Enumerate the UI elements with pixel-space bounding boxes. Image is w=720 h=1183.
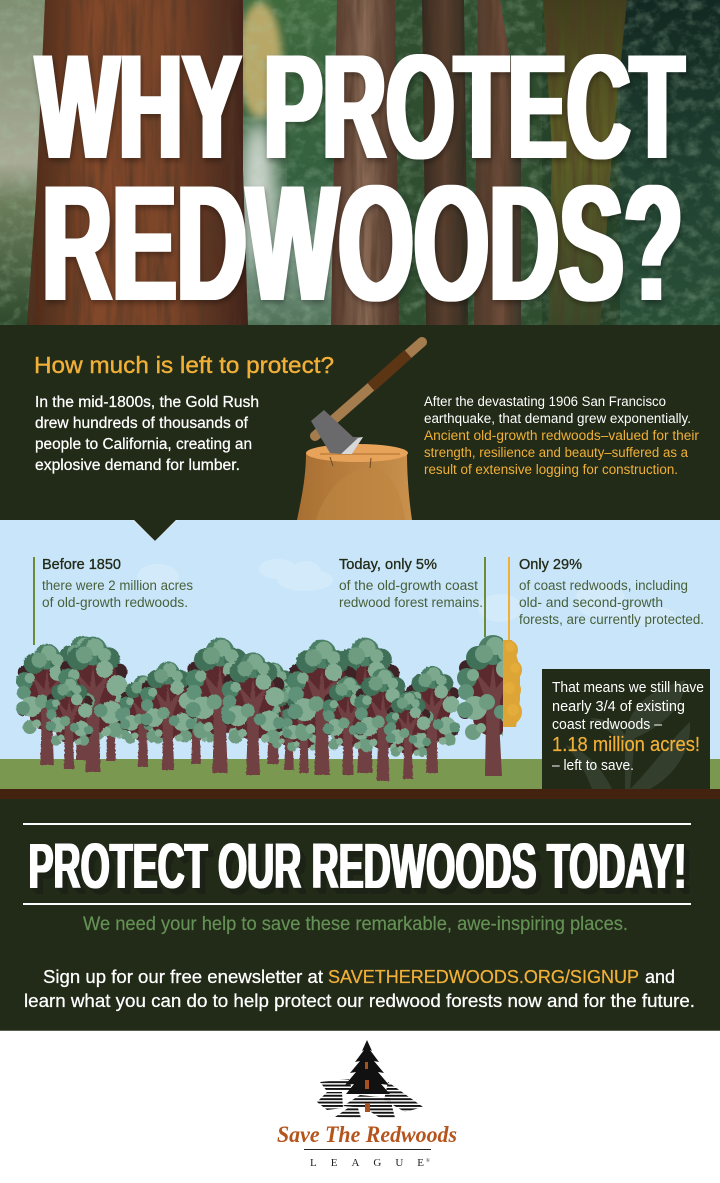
- clouds: [137, 559, 675, 625]
- text block: gold rush: people to California, creating an: [35, 436, 252, 453]
- logo: save the redwoods league: [277, 1040, 457, 1169]
- text block: 1906 earthquake: result of extensive logging for construction.: [424, 462, 678, 477]
- text block: sign up: SAVETHEREDWOODS.ORG/SIGNUP: [328, 967, 639, 987]
- callout: 1.18 million acres: That means we still have: [552, 680, 704, 696]
- text block: gold rush: [35, 394, 259, 474]
- stat: today only 5 percent: of the old-growth coast: [339, 578, 478, 593]
- text block: gold rush: In the mid-1800s, the Gold Rush: [35, 394, 259, 411]
- stat: before 1850: of old-growth redwoods.: [42, 595, 188, 610]
- stat: before 1850: there were 2 million acres: [42, 578, 193, 593]
- logo: save the redwoods league: ®: [426, 1158, 430, 1164]
- stat: only 29 percent: [508, 557, 704, 643]
- text block: 1906 earthquake: [424, 394, 700, 477]
- stat: today only 5 percent: [339, 557, 486, 637]
- text block: 1906 earthquake: After the devastating 1906 San Francisco: [424, 394, 666, 409]
- text block: sign up: learn what you can do to help protect our redwood forests now and for the future.: [24, 991, 695, 1011]
- stat: only 29 percent: forests, are currently protected.: [519, 612, 704, 627]
- panel: how much is left to protect: [0, 325, 720, 541]
- text block: gold rush: drew hundreds of thousands of: [35, 415, 249, 432]
- stat: before 1850: Before 1850: [42, 557, 121, 573]
- callout: 1.18 million acres: 1.18 million acres!: [552, 734, 700, 756]
- stat: only 29 percent: Only 29%: [519, 557, 582, 573]
- stat: only 29 percent: old- and second-growth: [519, 595, 663, 610]
- hero photo: redwood forest: [0, 0, 720, 325]
- text block: gold rush: explosive demand for lumber.: [35, 457, 240, 474]
- icon: axe in stump: [297, 342, 422, 520]
- illustration: redwood forest: [16, 636, 460, 781]
- text block: 1906 earthquake: earthquake, that demand grew exponentially.: [424, 411, 691, 426]
- callout: 1.18 million acres: [542, 669, 710, 789]
- wordmark: Save The Redwoods: [277, 1122, 457, 1147]
- arrow: notch pointer: [133, 519, 177, 541]
- callout: 1.18 million acres: coast redwoods –: [552, 717, 663, 733]
- stat: today only 5 percent: redwood forest remains.: [339, 595, 483, 610]
- text block: 1906 earthquake: strength, resilience and beauty–suffered as a: [424, 445, 688, 460]
- text block: we need your help: We need your help to save these remarkable, awe-inspiring places.: [83, 914, 628, 935]
- callout: 1.18 million acres: – left to save.: [552, 758, 634, 774]
- text block: sign up: [24, 967, 695, 1011]
- title: why protect redwoods: [36, 23, 684, 335]
- logo: save the redwoods league: LEAGUE: [310, 1157, 424, 1169]
- text block: 1906 earthquake: Ancient old-growth redwoods–valued for their: [424, 428, 700, 443]
- text block: sign up: Sign up for our free enewsletter at: [43, 967, 323, 987]
- stat: only 29 percent: of coast redwoods, including: [519, 578, 688, 593]
- panel: call to action: [0, 799, 720, 1031]
- panel: sky with redwood forest: [0, 520, 720, 799]
- icon: striped hills: [317, 1079, 423, 1118]
- stat: before 1850: [33, 557, 193, 645]
- icon: conifer: [345, 1040, 390, 1112]
- heading: how much is left: How much is left to protect?: [34, 352, 334, 378]
- stat: today only 5 percent: Today, only 5%: [339, 557, 437, 573]
- callout: 1.18 million acres: nearly 3/4 of existing: [552, 699, 685, 715]
- illustration: highlighted tree, 29 percent protected: [457, 635, 522, 776]
- text block: sign up: and: [645, 967, 675, 987]
- ground: [0, 759, 720, 789]
- icon: hands holding seedling watermark: [565, 680, 690, 789]
